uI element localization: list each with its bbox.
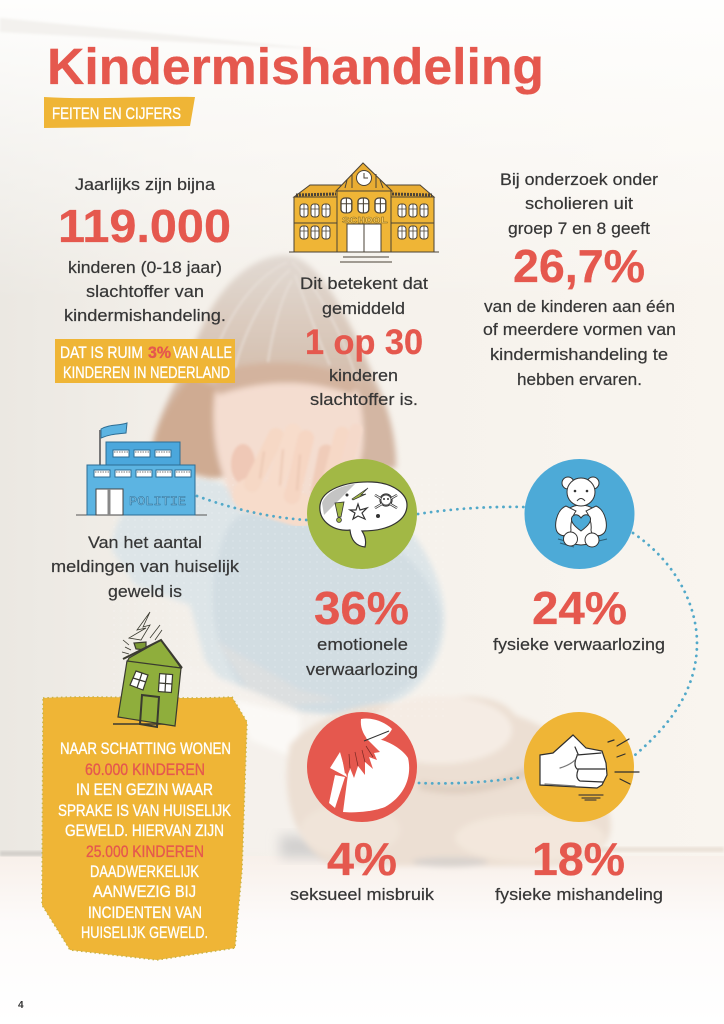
stat: sexual abuse: seksueel misbruik	[290, 886, 435, 904]
stat: emotional neglect	[306, 459, 418, 679]
icon: hand on child	[329, 719, 409, 812]
panel: estimate of children in violent homes: IN EEN GEZIN WAAR	[76, 780, 213, 799]
panel: estimate of children in violent homes: GEWELD. HIERVAN ZIJN	[65, 821, 224, 840]
callout: 3% of all children: DAT IS RUIM	[60, 343, 143, 362]
panel: estimate of children in violent homes: HUISELIJK GEWELD.	[81, 923, 208, 942]
block: 1 op 30: kinderen	[329, 367, 398, 385]
text: reports of domestic violence: meldingen van huiselijk	[51, 558, 240, 576]
stat: emotional neglect: verwaarlozing	[306, 661, 418, 679]
block: 119.000 children: slachtoffer van	[86, 283, 204, 301]
text: reports of domestic violence: Van het aantal	[88, 534, 202, 552]
panel: estimate of children in violent homes: SPRAKE IS VAN HUISELIJK	[58, 801, 232, 820]
stat: emotional neglect: emotionele	[317, 636, 408, 654]
icon: fist	[540, 735, 639, 800]
stat: physical neglect	[493, 459, 665, 654]
stat: physical abuse: fysieke mishandeling	[495, 886, 663, 904]
icon: police station: POLITIE	[129, 494, 186, 509]
block: 26,7%: van de kinderen aan één	[484, 298, 675, 316]
block: 1 op 30: 1 op 30	[305, 323, 423, 362]
stat: physical neglect: 24%	[532, 582, 627, 634]
panel: estimate of children in violent homes	[42, 697, 247, 960]
page number: 4	[18, 1000, 24, 1011]
stat: physical abuse	[495, 712, 663, 904]
subtitle banner: FEITEN EN CIJFERS	[52, 104, 181, 123]
panel: estimate of children in violent homes: 25.000 KINDEREN	[86, 842, 204, 861]
panel: estimate of children in violent homes: AANWEZIG BIJ	[93, 882, 196, 901]
block: 119.000 children: 119.000	[58, 200, 231, 252]
callout: 3% of all children: VAN ALLE	[173, 343, 232, 362]
stat: emotional neglect: 36%	[314, 582, 409, 634]
icon: school building: SCHOOL	[342, 216, 388, 226]
block: 26,7%: Bij onderzoek onder	[500, 171, 659, 189]
icon: speech bubble	[320, 482, 407, 547]
stat: physical neglect: fysieke verwaarlozing	[493, 636, 665, 654]
panel: estimate of children in violent homes: DAADWERKELIJK	[90, 862, 199, 881]
panel: estimate of children in violent homes: NAAR SCHATTING WONEN	[60, 739, 231, 758]
icon: police station	[76, 423, 207, 515]
panel: estimate of children in violent homes: INCIDENTEN VAN	[88, 903, 202, 922]
block: 1 op 30: gemiddeld	[322, 300, 405, 318]
text: reports of domestic violence: geweld is	[108, 583, 182, 601]
block: 1 op 30: slachtoffer is.	[310, 391, 418, 409]
callout: 3% of all children: KINDEREN IN NEDERLAND	[63, 363, 230, 382]
block: 119.000 children: kinderen (0-18 jaar)	[68, 259, 222, 277]
callout: 3% of all children	[55, 339, 235, 383]
dotted connector lines	[197, 496, 697, 783]
stat: sexual abuse: 4%	[327, 833, 397, 885]
panel: estimate of children in violent homes: 60.000 KINDEREN	[85, 760, 205, 779]
block: 119.000 children: kindermishandeling.	[64, 307, 226, 325]
stat: physical abuse: 18%	[532, 833, 625, 885]
title: Kindermishandeling	[47, 38, 544, 95]
callout: 3% of all children: 3%	[148, 343, 171, 362]
block: 119.000 children: Jaarlijks zijn bijna	[75, 176, 216, 194]
block: 26,7%: of meerdere vormen van	[483, 321, 676, 339]
stat: sexual abuse	[290, 712, 435, 904]
block: 1 op 30	[300, 275, 428, 409]
text: reports of domestic violence	[51, 534, 240, 601]
block: 26,7%: hebben ervaren.	[517, 371, 642, 389]
subtitle banner	[44, 97, 195, 128]
block: 26,7%: groep 7 en 8 geeft	[508, 220, 650, 238]
block: 119.000 children	[58, 176, 231, 325]
icon: house with lightning	[113, 612, 182, 727]
block: 26,7%: kindermishandeling te	[490, 346, 668, 364]
block: 1 op 30: Dit betekent dat	[300, 275, 428, 293]
icon: school building	[289, 163, 439, 262]
block: 26,7%: 26,7%	[513, 240, 645, 292]
block: 26,7%: scholieren uit	[525, 195, 633, 213]
icon: sad teddy bear	[556, 477, 607, 547]
block: 26,7%	[483, 171, 676, 389]
